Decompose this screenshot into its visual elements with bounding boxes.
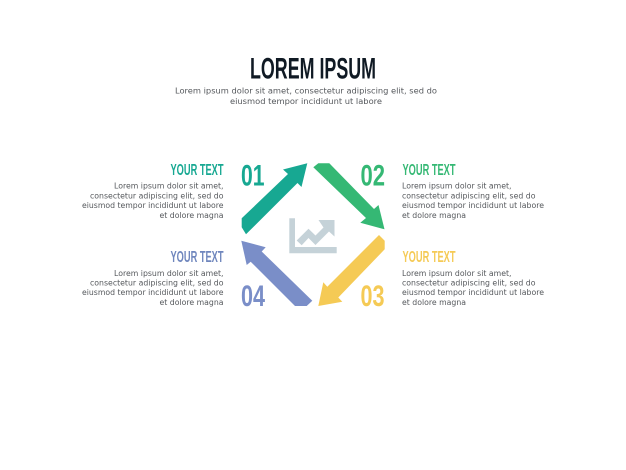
panel: step 1 text	[82, 162, 224, 220]
body: step 2: Lorem ipsum dolor sit amet,	[402, 182, 512, 190]
body: step 3: Lorem ipsum dolor sit amet,	[402, 269, 512, 278]
body: step 4: et dolore magna	[160, 298, 224, 307]
body: step 4	[82, 269, 224, 307]
subtitle: Lorem ipsum dolor sit amet, consectetur adipiscing elit, sed do	[175, 86, 437, 96]
heading: step 4: YOUR TEXT	[170, 249, 224, 266]
body: step 2: consectetur adipiscing elit, sed do	[402, 192, 536, 200]
body: step 1	[82, 182, 224, 220]
arrow: green step 2	[313, 163, 384, 229]
body: step 1: Lorem ipsum dolor sit amet,	[114, 182, 224, 190]
icon: growth chart	[289, 218, 337, 253]
body: step 3: consectetur adipiscing elit, sed do	[402, 278, 536, 288]
body: step 3: eiusmod tempor incididunt ut labore	[402, 288, 544, 297]
body: step 2: et dolore magna	[402, 211, 466, 220]
title: LOREM IPSUM	[250, 52, 376, 86]
body: step 1: consectetur adipiscing elit, sed do	[90, 192, 224, 200]
arrow: blue step 4	[241, 241, 312, 306]
body: step 3	[402, 269, 544, 307]
subtitle: eiusmod tempor incididunt ut labore	[230, 97, 382, 106]
body: step 4: eiusmod tempor incididunt ut labore	[82, 288, 224, 297]
number 02: 02	[360, 160, 385, 192]
panel: step 4 text	[82, 249, 224, 307]
arrow: yellow step 3	[318, 235, 385, 306]
body: step 2	[402, 182, 544, 220]
body: step 4: Lorem ipsum dolor sit amet,	[114, 269, 224, 278]
body: step 4: consectetur adipiscing elit, sed do	[90, 278, 224, 288]
number 03: 03	[360, 280, 384, 313]
arrow: teal step 1	[242, 163, 307, 234]
panel: step 3 text	[402, 249, 544, 307]
heading: step 3: YOUR TEXT	[402, 249, 456, 266]
body: step 1: et dolore magna	[160, 211, 224, 220]
subtitle	[175, 86, 437, 106]
number 04: 04	[241, 280, 265, 313]
number 01: 01	[241, 160, 264, 192]
heading: step 1: YOUR TEXT	[170, 162, 224, 179]
body: step 1: eiusmod tempor incididunt ut labore	[82, 201, 224, 210]
panel: step 2 text	[402, 162, 544, 220]
body: step 3: et dolore magna	[402, 298, 466, 307]
heading: step 2: YOUR TEXT	[402, 162, 456, 179]
body: step 2: eiusmod tempor incididunt ut labore	[402, 201, 544, 210]
